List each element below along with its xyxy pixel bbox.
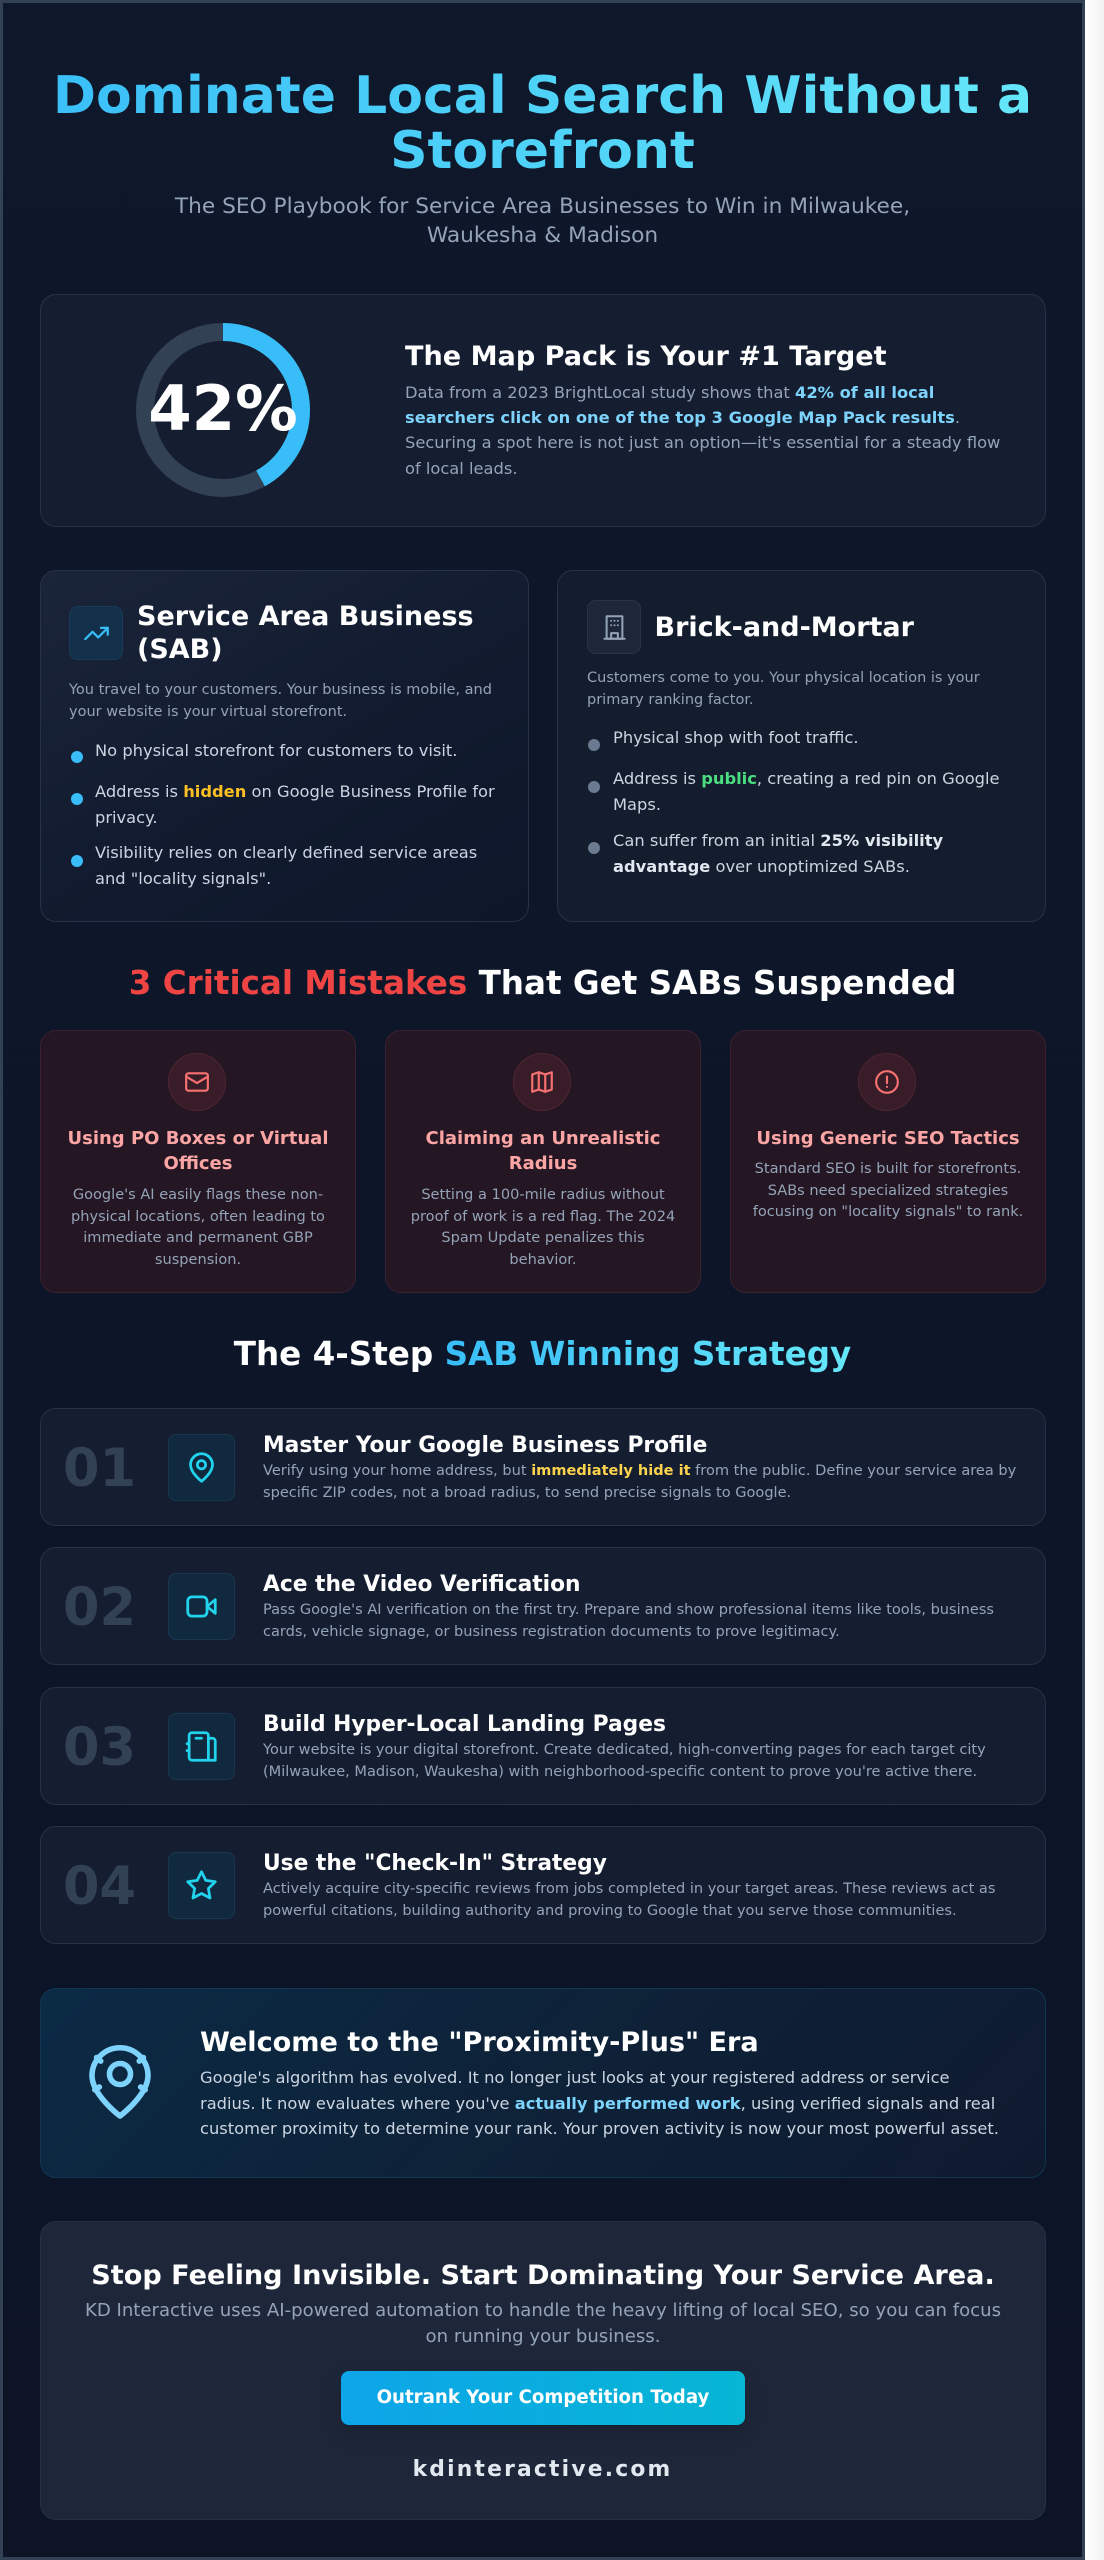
- heading: po boxes: [67, 1128, 329, 1174]
- bullet text 1: Physical shop with foot traffic.: [613, 728, 859, 747]
- panel: step 3: [40, 1687, 1046, 1805]
- heading: cta: Stop Feeling Invisible. Start Dominating Your Service Area.: [91, 2260, 995, 2291]
- panel: proximity plus: [40, 1988, 1046, 2178]
- step text: Your website is your digital storefront. Create dedicated, high-converting pages for each target city: [263, 1741, 986, 1758]
- panel: service area business: [40, 570, 529, 922]
- text: map pack description: of local leads.: [405, 459, 518, 478]
- step text: powerful citations, building authority and proving to Google that you serve those communities.: [263, 1902, 957, 1919]
- step text: (Milwaukee, Madison, Waukesha) with neighborhood-specific content to prove you're active there.: [263, 1763, 977, 1780]
- heading: critical mistakes: 3 Critical Mistakes That Get SABs Suspended: [129, 964, 956, 1002]
- chart: 42% donut: [136, 323, 310, 497]
- text: radius description: [411, 1186, 675, 1268]
- step title: Use the "Check-In" Strategy: [263, 1851, 607, 1876]
- text: proximity description: radius. It now evaluates where you've actually performed work, using verified signals and real: [200, 2094, 995, 2112]
- text: po boxes description: suspension.: [155, 1251, 241, 1268]
- bullet text 3: [613, 831, 943, 876]
- step text: [263, 1601, 994, 1640]
- button: outrank: Outrank Your Competition Today: [377, 2387, 709, 2408]
- panel: mistake 3: [730, 1030, 1046, 1293]
- bullet list: brick: [588, 728, 1000, 876]
- bullet text 1: No physical storefront for customers to visit.: [95, 741, 457, 760]
- subtitle: The SEO Playbook for Service Area Businesses to Win in Milwaukee,: [175, 194, 910, 219]
- step text: Pass Google's AI verification on the first try. Prepare and show professional items like tools, business: [263, 1601, 994, 1618]
- text: generic seo description: focusing on "locality signals" to rank.: [753, 1203, 1023, 1220]
- icon: star: [168, 1852, 235, 1919]
- text: radius description: Spam Update penalizes this: [441, 1229, 645, 1246]
- bullet dot 1: [588, 739, 600, 751]
- icon: notebook pages: [168, 1713, 235, 1780]
- bullet text 2: [95, 782, 495, 827]
- step title: Build Hyper-Local Landing Pages: [263, 1712, 666, 1737]
- bullet text 2: Address is public, creating a red pin on Google: [613, 769, 1000, 788]
- step title: Master Your Google Business Profile: [263, 1433, 707, 1458]
- text: brick description: [587, 670, 980, 708]
- heading: unrealistic radius: Claiming an Unrealistic: [426, 1128, 660, 1149]
- icon: map: [513, 1053, 571, 1111]
- bullet text 2: Maps.: [613, 795, 661, 814]
- panel: map pack stat: [40, 294, 1046, 527]
- text: generic seo description: [753, 1160, 1023, 1220]
- bullet text 3: and "locality signals".: [95, 869, 271, 888]
- text: brick description: primary ranking factor.: [587, 692, 754, 708]
- panel: mistake 1: [40, 1030, 356, 1293]
- icon: locate pin: [89, 2045, 151, 2119]
- text: cta description: on running your business.: [426, 2326, 660, 2347]
- panel: brick and mortar: [557, 570, 1046, 922]
- stat: 42 percent: 42%: [148, 372, 298, 445]
- icon: mail: [168, 1053, 226, 1111]
- bullet text 3: advantage over unoptimized SABs.: [613, 857, 910, 876]
- text: po boxes description: Google's AI easily flags these non-: [73, 1186, 323, 1203]
- text: sab description: You travel to your customers. Your business is mobile, and: [69, 682, 492, 698]
- bullet dot 3: [71, 855, 83, 867]
- number 03: 03: [63, 1717, 136, 1778]
- number 02: 02: [63, 1577, 136, 1638]
- step text: [263, 1880, 995, 1919]
- panel: mistake 2: [385, 1030, 701, 1293]
- text: cta description: [85, 2300, 1001, 2347]
- bullet dot 3: [588, 842, 600, 854]
- button: outrank: [341, 2371, 745, 2425]
- heading: service area business: Service Area Business: [137, 601, 474, 632]
- bullet dot 2: [71, 793, 83, 805]
- text: proximity description: Google's algorithm has evolved. It no longer just looks at your registered address or service: [200, 2068, 950, 2087]
- title: Dominate Local Search Without a: [53, 66, 1032, 126]
- page edge: [1085, 0, 1104, 2560]
- bullet text 2: [613, 769, 1000, 814]
- heading: service area business: (SAB): [137, 634, 223, 665]
- icon: map pin: [168, 1434, 235, 1501]
- step text: [263, 1462, 1016, 1501]
- bullet text 2: privacy.: [95, 808, 158, 827]
- text: proximity description: customer proximity to determine your rank. Your proven activity is now your most powerful asset.: [200, 2119, 999, 2138]
- number 04: 04: [63, 1856, 136, 1917]
- subtitle: Waukesha & Madison: [427, 223, 658, 248]
- text: radius description: behavior.: [509, 1251, 577, 1268]
- text: radius description: Setting a 100-mile radius without: [421, 1186, 665, 1203]
- text: map pack description: [405, 383, 1000, 478]
- panel: step 1: [40, 1408, 1046, 1526]
- text: cta description: KD Interactive uses AI-powered automation to handle the heavy lifting of local SEO, so you can focus: [85, 2300, 1001, 2321]
- heading: po boxes: Using PO Boxes or Virtual: [67, 1128, 329, 1149]
- heading: generic seo: Using Generic SEO Tactics: [756, 1128, 1020, 1149]
- heading: brick and mortar: Brick-and-Mortar: [654, 612, 914, 643]
- text: map pack description: Data from a 2023 BrightLocal study shows that 42% of all local: [405, 383, 934, 402]
- heading: proximity plus: Welcome to the "Proximity-Plus" Era: [200, 2027, 759, 2058]
- bullet text 2: Address is hidden on Google Business Profile for: [95, 782, 495, 801]
- text: sab description: [69, 682, 492, 720]
- number 01: 01: [63, 1438, 136, 1499]
- panel: step 2: [40, 1547, 1046, 1665]
- text: generic seo description: SABs need specialized strategies: [768, 1182, 1008, 1199]
- step text: specific ZIP codes, not a broad radius, to send precise signals to Google.: [263, 1484, 791, 1501]
- text: po boxes description: immediate and permanent GBP: [83, 1229, 313, 1246]
- title: Storefront: [390, 120, 695, 180]
- panel: step 4: [40, 1826, 1046, 1944]
- text: po boxes description: [71, 1186, 325, 1268]
- title: [3, 69, 1082, 178]
- heading: winning strategy: The 4-Step SAB Winning Strategy: [234, 1335, 851, 1373]
- bullet dot 1: [71, 751, 83, 763]
- heading: service area business: [137, 601, 474, 665]
- bullet text 3: Visibility relies on clearly defined service areas: [95, 843, 477, 862]
- step text: Actively acquire city-specific reviews from jobs completed in your target areas. These reviews act as: [263, 1880, 995, 1897]
- heading: unrealistic radius: [426, 1128, 660, 1174]
- heading: unrealistic radius: Radius: [509, 1153, 577, 1174]
- step text: cards, vehicle signage, or business registration documents to prove legitimacy.: [263, 1623, 840, 1640]
- step title: Ace the Video Verification: [263, 1572, 581, 1597]
- step text: Verify using your home address, but immediately hide it from the public. Define your service area by: [263, 1462, 1016, 1479]
- website url: kdinteractive.com: [413, 2457, 672, 2482]
- bullet dot 2: [588, 781, 600, 793]
- text: generic seo description: Standard SEO is built for storefronts.: [755, 1160, 1021, 1177]
- icon: video: [168, 1573, 235, 1640]
- bullet list: sab: [71, 741, 495, 888]
- panel: call to action: [40, 2221, 1046, 2520]
- text: map pack description: Securing a spot here is not just an option—it's essential for a steady flow: [405, 433, 1000, 452]
- icon: building: [587, 600, 641, 654]
- text: po boxes description: physical locations, often leading to: [71, 1208, 325, 1225]
- subtitle: [174, 194, 910, 248]
- bullet text 3: Can suffer from an initial 25% visibility: [613, 831, 943, 850]
- text: proximity description: [200, 2068, 999, 2138]
- text: sab description: your website is your virtual storefront.: [69, 704, 347, 720]
- text: map pack description: searchers click on one of the top 3 Google Map Pack results.: [405, 408, 960, 427]
- bullet text 3: [95, 843, 477, 888]
- icon: trending up: [69, 606, 123, 660]
- text: radius description: proof of work is a red flag. The 2024: [411, 1208, 675, 1225]
- heading: po boxes: Offices: [164, 1153, 232, 1174]
- text: brick description: Customers come to you. Your physical location is your: [587, 670, 980, 686]
- step text: [263, 1741, 986, 1780]
- icon: alert: [858, 1053, 916, 1111]
- heading: map pack: The Map Pack is Your #1 Target: [405, 341, 887, 372]
